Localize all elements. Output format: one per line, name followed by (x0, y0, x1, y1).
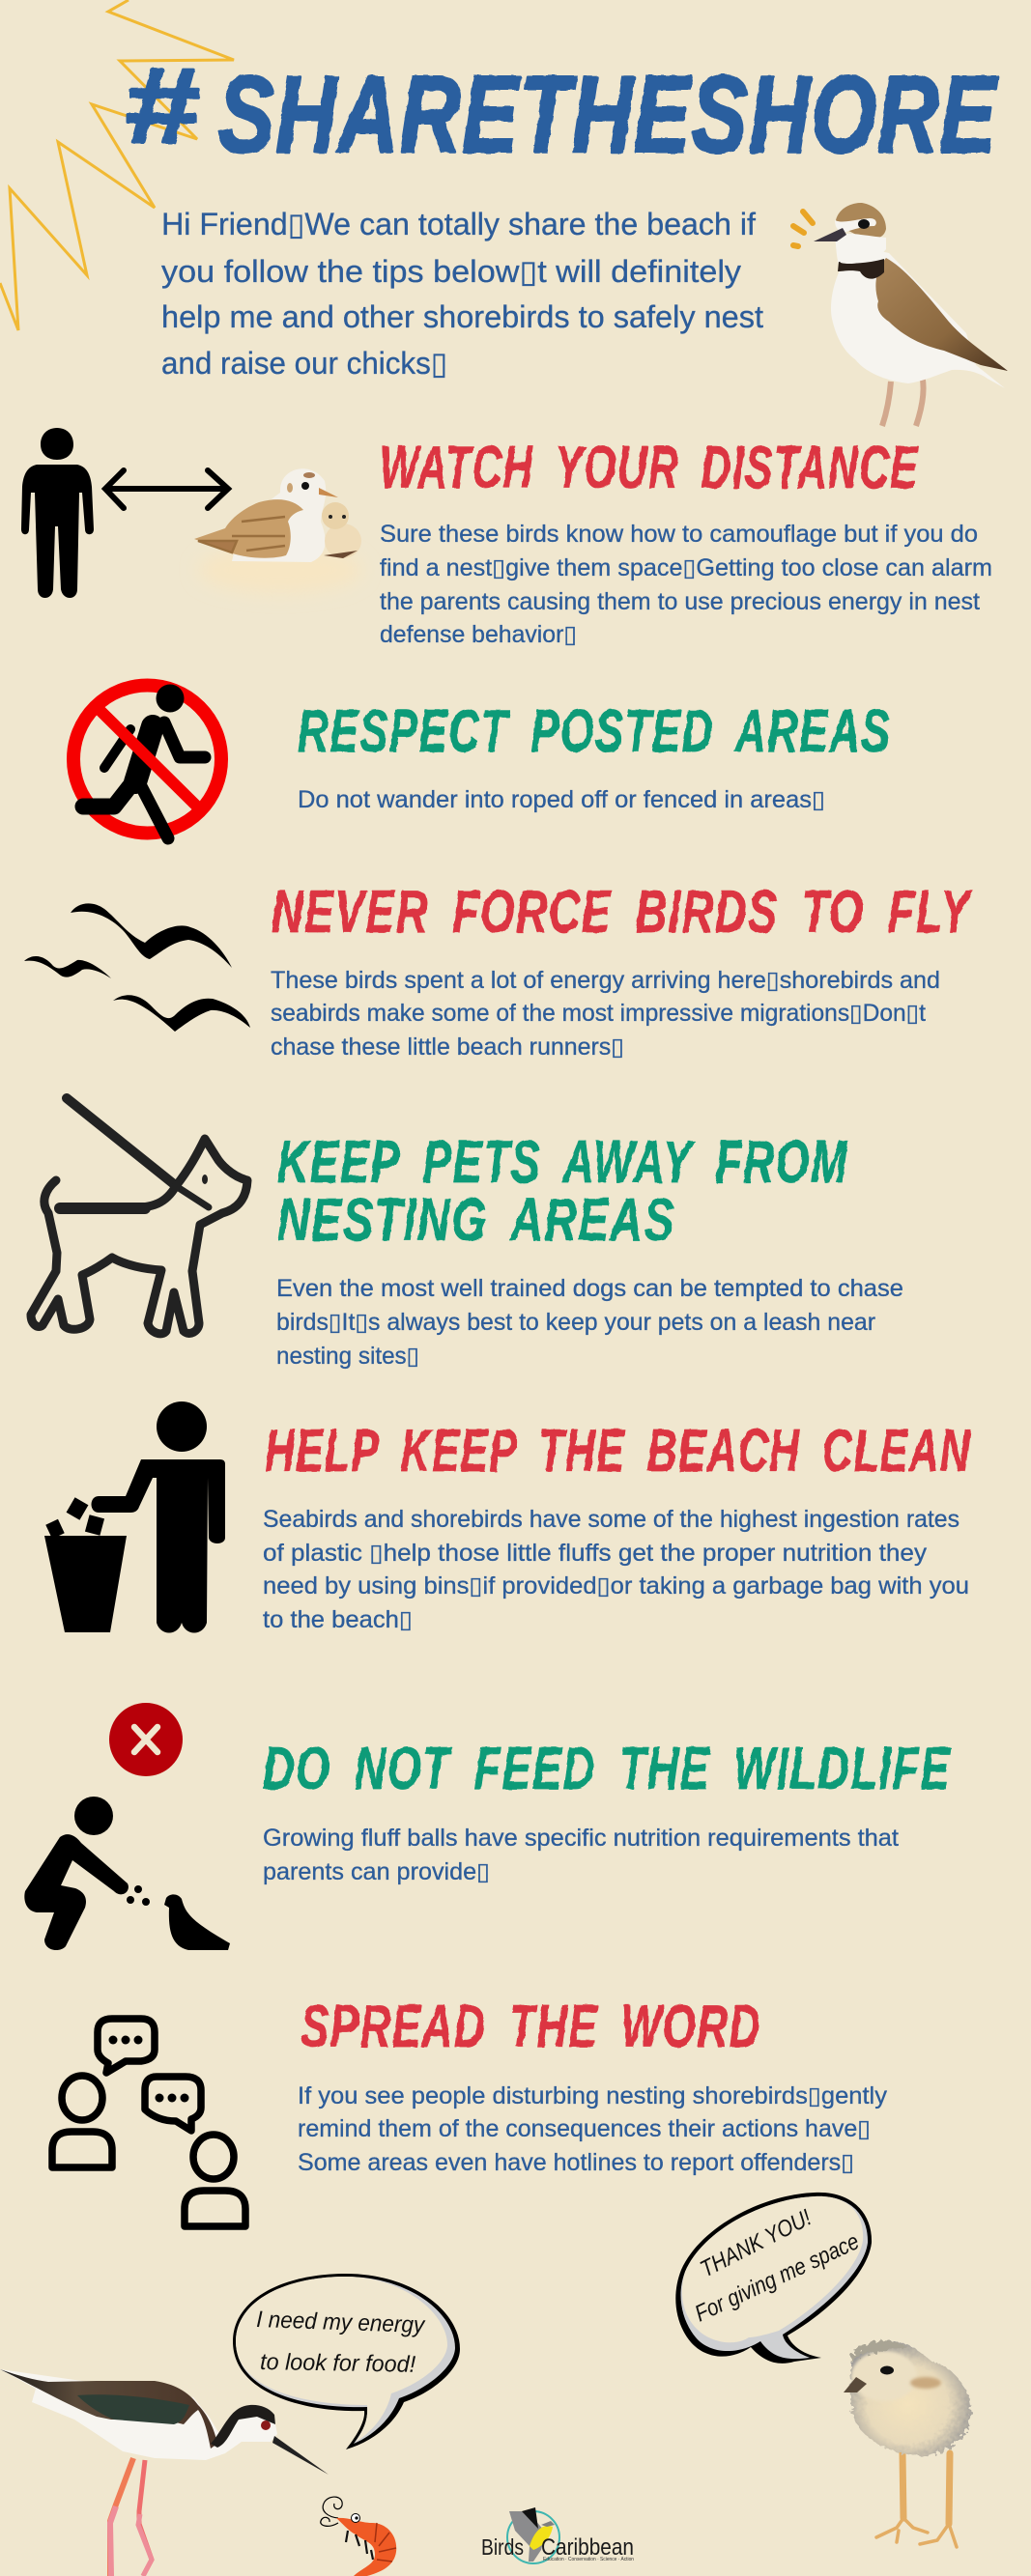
heading (277, 1129, 848, 1254)
icon: red cross badge (109, 1703, 183, 1776)
panel: watch your distance (21, 428, 992, 648)
body text (380, 521, 992, 648)
icon: flying birds (24, 903, 250, 1032)
speech bubble: energy (233, 2274, 460, 2449)
body text: to the beach▯ (263, 1606, 413, 1633)
panel: do not feed (24, 1703, 951, 1950)
icon: person with bin (44, 1401, 225, 1632)
illustration: piping plover chick (844, 2341, 971, 2547)
panel: keep beach clean (44, 1401, 971, 1633)
speech bubble: thank you: THANK YOU! (696, 2204, 816, 2282)
body text (263, 1825, 899, 1885)
icon: person feeding bird (24, 1797, 230, 1950)
panel: spread the word (52, 1994, 888, 2226)
logo: BirdsCaribbean: Caribbean (541, 2534, 634, 2561)
intro text: help me and other shorebirds to safely nest (161, 299, 763, 334)
speech bubble: energy: to look for food! (260, 2349, 416, 2378)
speech bubble: thank you (675, 2193, 872, 2364)
intro text: Hi Friend▯We can totally share the beach if (161, 207, 756, 241)
title: # (124, 46, 201, 165)
icon: dog on leash (31, 1098, 247, 1334)
body text: nesting sites▯ (276, 1343, 419, 1370)
body text: Seabirds and shorebirds have some of the highest ingestion rates (263, 1506, 959, 1533)
logo: BirdsCaribbean: Education · Conservation · Science · Action (543, 2557, 634, 2562)
body text: These birds spent a lot of energy arriving here▯shorebirds and (271, 967, 940, 994)
intro text: and raise our chicks▯ (161, 346, 447, 381)
body text: seabirds make some of the most impressive migrations▯Don▯t (271, 1000, 926, 1027)
body text: Do not wander into roped off or fenced in areas▯ (298, 786, 825, 813)
intro text (161, 207, 763, 381)
illustration: plover and chick (194, 468, 362, 593)
illustration: stilt (0, 2369, 329, 2576)
icon: double arrow (105, 470, 228, 508)
logo: BirdsCaribbean: Birds (481, 2534, 524, 2560)
body text: Some areas even have hotlines to report offenders▯ (298, 2149, 854, 2176)
body text: find a nest▯give them space▯Getting too close can alarm (380, 554, 992, 581)
body text (276, 1275, 903, 1370)
body text: If you see people disturbing nesting shorebirds▯gently (298, 2082, 888, 2109)
icon: exclamation marks (793, 212, 813, 246)
body text: Growing fluff balls have specific nutrition requirements that (263, 1825, 899, 1852)
body text: chase these little beach runners▯ (271, 1033, 624, 1061)
body text: remind them of the consequences their actions have▯ (298, 2115, 871, 2142)
body text: the parents causing them to use precious energy in nest (380, 588, 980, 615)
speech bubble: energy: I need my energy (256, 2307, 427, 2338)
speech bubble: thank you: For giving me space (691, 2228, 863, 2327)
heading: SPREAD THE WORD (301, 1994, 761, 2060)
body text: birds▯It▯s always best to keep your pets on a leash near (276, 1309, 875, 1336)
body text (298, 2082, 888, 2176)
logo: BirdsCaribbean (481, 2507, 634, 2563)
panel: respect posted areas (73, 684, 891, 838)
illustration: plover (814, 203, 1008, 426)
body text (271, 967, 940, 1061)
decorative yellow zigzag (0, 0, 234, 330)
icon: no entry runner (73, 684, 221, 838)
intro text: you follow the tips below▯t will definitely (161, 254, 741, 289)
body text: of plastic ▯help those little fluffs get the proper nutrition they (263, 1540, 928, 1567)
body text: need by using bins▯if provided▯or taking a garbage bag with you (263, 1572, 969, 1599)
heading: NESTING AREAS (277, 1187, 675, 1254)
icon: person (21, 428, 94, 598)
panel: never force birds to fly (24, 879, 974, 1061)
illustration: shrimp (321, 2497, 396, 2576)
body text: Even the most well trained dogs can be tempted to chase (276, 1275, 903, 1302)
body text: defense behavior▯ (380, 621, 577, 648)
body text: parents can provide▯ (263, 1858, 490, 1885)
body text (263, 1506, 969, 1633)
icon: people talking (52, 2019, 245, 2226)
body text: Sure these birds know how to camouflage but if you do (380, 521, 978, 548)
panel: keep pets away (31, 1098, 903, 1370)
